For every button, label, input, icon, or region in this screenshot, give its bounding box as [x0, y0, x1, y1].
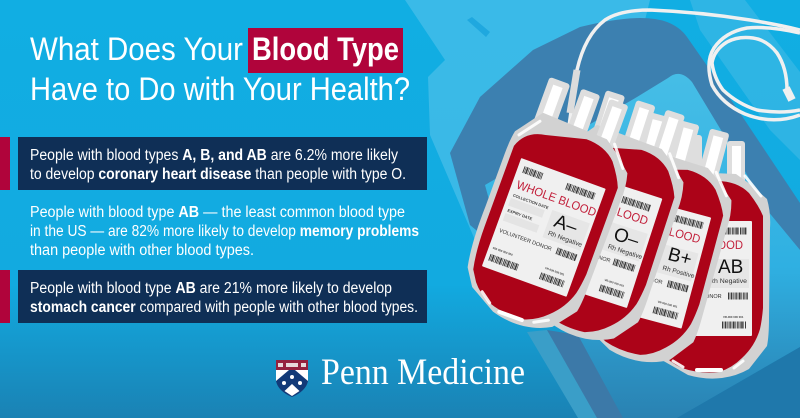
- icon: blood bag A-: 000 000 000 000: [492, 246, 514, 257]
- background: lower right dark corner: [677, 347, 800, 418]
- bag tab: [497, 309, 524, 323]
- icon: blood bag O-: Rh Negative: [607, 243, 643, 261]
- icon: blood bag O-: VOLUNTEER DONOR: [556, 242, 611, 264]
- icon: blood bag AB: AB: [718, 257, 743, 278]
- panel: coronary heart disease: to develop coronary heart disease than people with type O.: [30, 166, 406, 183]
- icon: blood bag A-: VR-000 000 001: [544, 266, 565, 277]
- icon: blood bag AB: VOLUNTEER DONOR: [666, 294, 722, 300]
- background: lower diagonal bands: [527, 330, 623, 418]
- icon: blood bag B+: WHOLE BLOOD: [617, 211, 702, 246]
- icon: blood bag O-: WHOLE BLOOD: [566, 189, 650, 228]
- icon: Penn shield: [276, 360, 308, 397]
- text block: memory problems: People with blood type AB — the least common blood type: [30, 204, 405, 221]
- panel: stomach cancer: People with blood type AB are 21% more likely to develop: [30, 280, 392, 297]
- icon: blood bag AB: WHOLE BLOOD: [659, 238, 743, 252]
- icon: blood bag O-: [512, 84, 706, 354]
- background: light bag shapes top: [405, 0, 800, 240]
- icon: blood bag O-: VR-000 000 001: [604, 278, 625, 288]
- icon: blood bag A-: EXPIRY DATE: [507, 208, 533, 221]
- icon: coiled tube: [568, 10, 800, 133]
- text block: memory problems: [30, 204, 419, 259]
- icon: blood bag B+: VOLUNTEER DONOR: [608, 266, 663, 286]
- text block: memory problems: than people with other blood types.: [30, 242, 254, 259]
- title: Blood Type: [252, 31, 399, 67]
- panel: coronary heart disease: [0, 137, 427, 190]
- title highlight box: [248, 28, 403, 73]
- icon: blood bag A-: Rh Negative: [547, 230, 583, 249]
- icon: blood bag A-: VOLUNTEER DONOR: [498, 228, 552, 253]
- background: dark bag silhouette: [450, 18, 800, 300]
- panel: stomach cancer: stomach cancer compared with people with other blood types.: [30, 299, 418, 316]
- icon: blood bag B+: Rh Positive: [662, 265, 695, 280]
- icon: blood bag B+: VR-000 000 001: [657, 300, 678, 309]
- title: [30, 28, 410, 107]
- panel: stomach cancer: [0, 270, 427, 323]
- background: light inner bag shape: [485, 74, 800, 418]
- title: What Does Your: [30, 31, 243, 67]
- icon: blood bag O-: O–: [611, 224, 642, 252]
- icon: blood bag A-: [451, 71, 652, 343]
- icon: blood bag AB: [645, 135, 770, 379]
- icon: blood bag B+: B+: [666, 244, 694, 271]
- panel: coronary heart disease: People with blood types A, B, and AB are 6.2% more likely: [30, 147, 398, 164]
- icon: blood bag A-: COLLECTION DATE: [512, 193, 550, 210]
- title: Have to Do with Your Health?: [30, 71, 410, 107]
- icon: blood bag AB: VR-000 000 001: [723, 315, 744, 319]
- icon: blood bag A-: A–: [551, 211, 581, 239]
- logo: Penn Medicine: Penn Medicine: [321, 352, 525, 393]
- icon: blood bag B+: [567, 107, 751, 375]
- text block: memory problems: in the US — are 82% more likely to develop memory problems: [30, 223, 419, 240]
- icon: blood bag A-: WHOLE BLOOD: [515, 178, 599, 220]
- logo: Penn Medicine: [276, 352, 525, 397]
- icon: blood bag AB: Rh Negative: [709, 278, 747, 285]
